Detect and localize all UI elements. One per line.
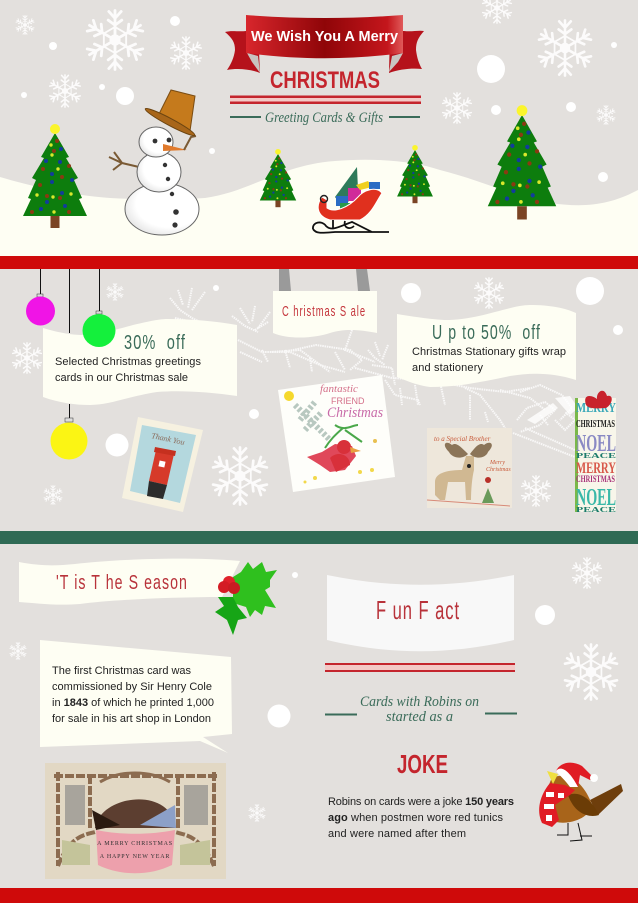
joke heading: JOKE: [397, 749, 448, 779]
joke text: Robins on cards were a joke 150 years: [328, 796, 514, 808]
card: robin: fantastic: [320, 383, 358, 395]
tree small left: [260, 149, 296, 207]
gift bag: MERRY: [576, 460, 616, 477]
robin subtitle: Cards with Robins on: [360, 694, 479, 710]
panel: fun fact: [327, 575, 514, 651]
fun fact heading: F un F act: [376, 595, 460, 625]
panel: 30% off: [43, 319, 237, 405]
subtitle with rules: Greeting Cards & Gifts: [265, 110, 383, 126]
green band: [0, 531, 638, 544]
bauble strings: [40, 269, 100, 420]
history text: [52, 665, 214, 725]
card: robin: [278, 375, 395, 492]
gift bag: MERRY: [576, 401, 616, 416]
tree left: [23, 124, 87, 228]
robin: [539, 763, 623, 841]
snow dots: [21, 16, 623, 728]
30% off text: Selected Christmas greetings: [55, 356, 202, 368]
50% text: and stationery: [412, 362, 484, 374]
card: robin: Christmas: [327, 405, 383, 421]
panel: up to 50% off: [397, 305, 576, 387]
50% heading: U p to 50% off: [432, 322, 541, 344]
card: moose: Christmas: [486, 467, 511, 473]
tree right: [488, 105, 556, 220]
card: post box: Thank You: [151, 431, 185, 447]
first christmas card: [45, 763, 226, 879]
title: Christmas: CHRISTMAS: [270, 67, 380, 94]
history text: The first Christmas card was: [52, 665, 192, 677]
robin subtitle: started as a: [386, 709, 453, 725]
holly: [215, 562, 277, 635]
card: moose: Merry: [489, 460, 505, 466]
30% off text: cards in our Christmas sale: [55, 372, 188, 384]
double rule: [230, 96, 421, 104]
history text: for sale in his art shop in London: [52, 713, 211, 725]
card: post box: [122, 417, 203, 512]
robin subtitle: [325, 694, 517, 725]
snowman: [109, 90, 199, 235]
history text: commissioned by Sir Henry Cole: [52, 681, 212, 693]
gift bag: CHRISTMAS: [576, 419, 615, 430]
joke text: [328, 796, 514, 840]
banner text: We Wish You A Merry: [251, 29, 398, 45]
sign: Christmas Sale: [273, 269, 377, 338]
sleigh with gifts: [313, 167, 389, 233]
tree small right: [397, 145, 433, 203]
header banner: [225, 15, 424, 73]
50% text: Christmas Stationary gifts wrap: [412, 346, 566, 358]
bauble magenta: [26, 294, 55, 326]
gift bag: CHRISTMAS: [576, 474, 615, 484]
first christmas card: A HAPPY NEW YEAR: [100, 854, 170, 860]
bottom red band: [0, 888, 638, 903]
top red band: [0, 256, 638, 269]
50% text: [412, 346, 566, 374]
santa sleigh highlight: [527, 396, 578, 424]
fun fact double rule: [325, 663, 515, 672]
snow ground: [0, 160, 638, 256]
speech panel: history: [40, 640, 232, 753]
bauble yellow: [50, 418, 88, 460]
joke text: ago when postmen wore red tunics: [328, 812, 504, 824]
reindeer and sleigh outline: [170, 288, 575, 457]
gift bag: PEACE: [576, 506, 617, 514]
history text: in 1843 of which he printed 1,000: [52, 697, 214, 709]
gift bag: [575, 391, 617, 514]
tis the season heading: 'T is T he S eason: [56, 572, 188, 594]
card: moose: to a Special Brother: [434, 435, 491, 443]
bauble green: [82, 311, 116, 347]
first christmas card: A MERRY CHRISTMAS: [97, 841, 173, 847]
joke text: and were named after them: [328, 828, 466, 840]
30% off heading: 30% off: [124, 332, 186, 354]
card: moose: [427, 428, 512, 508]
30% off text: [55, 356, 202, 384]
panel: tis the season: [19, 559, 240, 605]
gift bag: PEACE: [576, 452, 617, 460]
card: robin: FRIEND: [331, 396, 365, 406]
sign text: C hristmas S ale: [282, 303, 366, 320]
